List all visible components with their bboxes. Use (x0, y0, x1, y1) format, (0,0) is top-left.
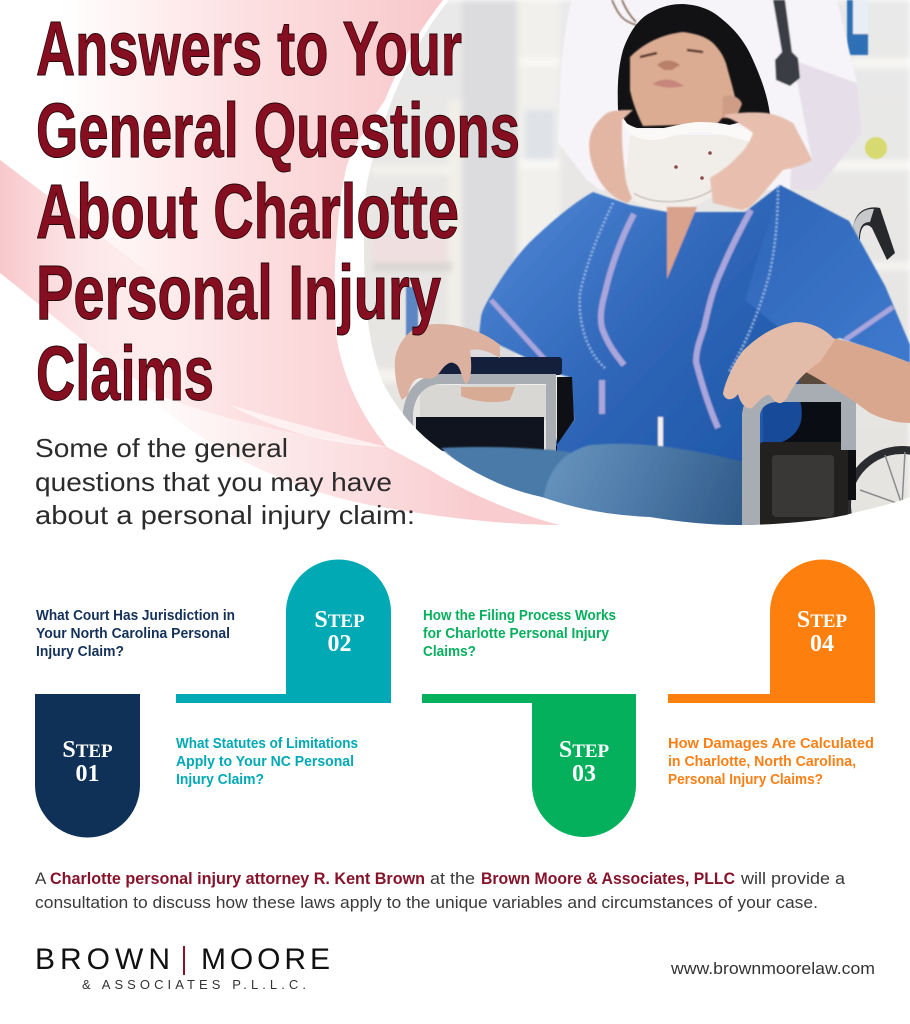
step 04 block: STEP (797, 607, 848, 633)
intro text: questions that you may have (35, 467, 392, 497)
logo: Brown Moore & Associates: MOORE (201, 943, 330, 976)
pink swoosh background (0, 0, 560, 525)
step 04 block (668, 560, 875, 703)
step 02 block: STEP (314, 607, 365, 633)
step 03 question (423, 608, 616, 660)
step 02 question (176, 736, 358, 788)
logo: Brown Moore & Associates (35, 943, 330, 992)
photo: wheelchair left side (408, 357, 574, 453)
photo: patient right hand (723, 322, 835, 408)
intro text (35, 433, 415, 530)
photo: wheelchair rear wheel (844, 446, 910, 516)
step 04 question: Personal Injury Claims? (668, 772, 823, 788)
photo: doctor hands (589, 110, 812, 210)
step 01 block: STEP (62, 737, 113, 763)
step 01 block: 01 (76, 761, 100, 787)
photo: hair (618, 4, 770, 128)
step 02 block: 02 (328, 631, 352, 657)
step 01 block (35, 694, 140, 838)
step 03 block (422, 694, 636, 837)
step 04 block: 04 (810, 631, 834, 657)
step 03 block: STEP (559, 737, 610, 763)
title: General Questions (36, 88, 520, 174)
photo: face (630, 32, 742, 126)
closing paragraph: Brown Moore & Associates, PLLC (481, 869, 735, 888)
photo: wheelchair handle (853, 207, 895, 260)
closing paragraph: will provide a (740, 869, 846, 888)
step 01 question: Your North Carolina Personal (36, 626, 230, 642)
step 01 question: What Court Has Jurisdiction in (36, 608, 235, 624)
title: Claims (36, 331, 214, 417)
step 02 question: What Statutes of Limitations (176, 736, 358, 752)
photo: jeans (441, 444, 755, 530)
title: About Charlotte (36, 169, 459, 255)
closing paragraph: A (35, 869, 47, 888)
closing paragraph: at the (430, 869, 475, 888)
photo: cervical collar (622, 120, 753, 211)
step 03 block: 03 (572, 761, 596, 787)
title: Personal Injury (36, 250, 441, 336)
step 01 question (36, 608, 235, 660)
photo: patient in wheelchair with neck brace (364, 0, 910, 525)
title: Answers to Your (36, 6, 462, 92)
step 03 question: for Charlotte Personal Injury (423, 626, 609, 642)
step 04 question (668, 736, 874, 788)
photo: wheelchair right side (751, 370, 856, 530)
photo: doctor white coat (558, 0, 862, 190)
closing paragraph (35, 869, 846, 912)
step 01 question: Injury Claim? (36, 644, 124, 660)
photo: patient right forearm (802, 335, 910, 423)
logo: Brown Moore & Associates: & ASSOCIATES P.L.L.C. (82, 977, 306, 992)
photo: blue blouse (479, 185, 910, 470)
step 03 question: Claims? (423, 644, 476, 660)
intro text: Some of the general (35, 433, 288, 463)
step 02 block (176, 560, 391, 703)
photo: binders and apple on shelf (406, 0, 887, 337)
photo: blurred shelves background (340, 0, 910, 540)
website url: www.brownmoorelaw.com (670, 959, 875, 978)
photo: patient left hand (395, 324, 500, 400)
closing paragraph: Charlotte personal injury attorney R. Kent Brown (50, 869, 425, 888)
step 02 question: Apply to Your NC Personal (176, 754, 354, 770)
logo: Brown Moore & Associates: BROWN (35, 943, 170, 976)
step 04 question: How Damages Are Calculated (668, 736, 874, 752)
step 03 question: How the Filing Process Works (423, 608, 616, 624)
closing paragraph: consultation to discuss how these laws apply to the unique variables and circumstances of your case. (35, 893, 818, 912)
title (36, 6, 520, 417)
step 04 question: in Charlotte, North Carolina, (668, 754, 856, 770)
step 02 question: Injury Claim? (176, 772, 264, 788)
intro text: about a personal injury claim: (35, 500, 415, 530)
